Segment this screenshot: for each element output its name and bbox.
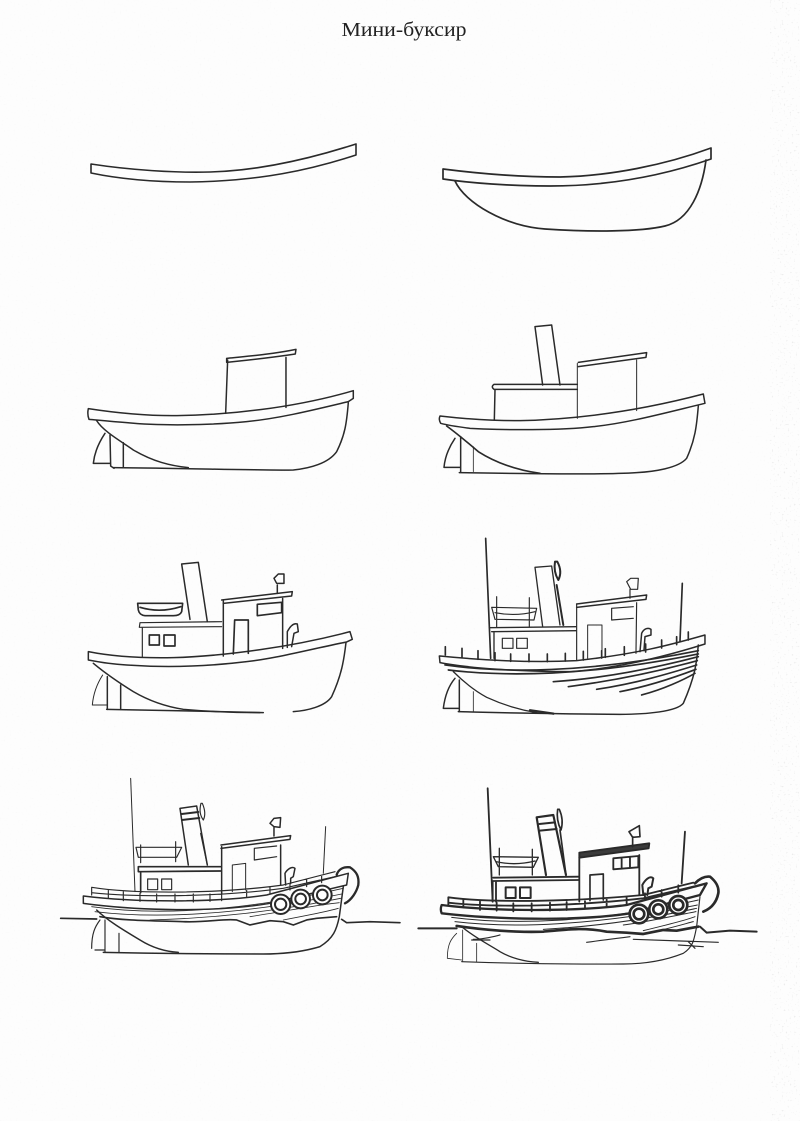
door — [590, 874, 603, 901]
roof — [222, 592, 292, 603]
hull — [455, 160, 706, 231]
windows — [502, 638, 527, 648]
step 6: masts, stakes and planks — [439, 538, 705, 714]
door — [233, 620, 248, 654]
flag on mast — [274, 574, 284, 593]
deck strip — [83, 873, 348, 910]
stern curve — [447, 426, 540, 473]
funnel — [180, 806, 207, 865]
funnel bands — [539, 822, 557, 831]
wheelhouse window — [613, 856, 638, 869]
rudder — [93, 433, 123, 468]
hull rail — [439, 394, 705, 430]
tyre 2 — [291, 890, 310, 908]
flag on mast — [627, 578, 638, 598]
funnel — [535, 325, 560, 385]
funnel — [535, 566, 560, 627]
funnel spar — [557, 809, 566, 875]
waterline — [418, 927, 757, 933]
tyre 3 — [669, 896, 687, 914]
hull body — [113, 403, 348, 470]
step 4: funnel and low house — [439, 325, 705, 474]
wheelhouse — [222, 845, 281, 893]
funnel spar — [200, 803, 207, 865]
step 5: windows, door, boat, vent — [88, 562, 352, 713]
hull planks — [445, 651, 698, 695]
vent pipe — [285, 868, 295, 885]
wave line on hull — [100, 917, 337, 925]
windows — [148, 879, 172, 890]
deck strip — [441, 883, 707, 919]
windows — [149, 635, 175, 646]
step 3: hull with cabin — [88, 349, 353, 470]
tyre 2 — [649, 900, 667, 918]
wheelhouse window — [612, 607, 633, 620]
wheelhouse — [579, 855, 639, 902]
roof — [227, 349, 296, 362]
hull body — [459, 406, 698, 474]
wheelhouse — [577, 360, 637, 418]
step 8: finished tug with ink shading — [418, 788, 757, 964]
deck strip — [443, 148, 711, 186]
upper railing — [448, 883, 693, 911]
bow mast — [682, 832, 685, 883]
hull body — [458, 645, 698, 714]
upper railing — [92, 872, 335, 902]
hull planks — [92, 888, 343, 920]
stern curve — [93, 663, 260, 713]
cabin — [226, 357, 286, 413]
lifeboat with davits — [492, 597, 537, 627]
vent pipe — [287, 624, 298, 647]
rudder — [447, 930, 477, 962]
wheelhouse — [577, 603, 637, 660]
stern curve — [462, 927, 538, 962]
hull body — [462, 897, 700, 964]
vent pipe — [640, 628, 651, 652]
step 2: deck strip and hull — [443, 148, 711, 231]
wheelhouse — [223, 598, 283, 656]
roof — [578, 353, 647, 367]
door — [588, 625, 602, 658]
step 1: deck strip — [91, 144, 356, 182]
wheelhouse window — [254, 846, 277, 860]
stern curve — [97, 421, 188, 468]
roof — [221, 836, 291, 848]
roof — [577, 595, 647, 607]
funnel spar — [555, 562, 563, 625]
tyre 1 — [271, 895, 290, 914]
hull rail — [88, 391, 353, 425]
flag on mast — [270, 818, 281, 836]
hull rail — [88, 632, 352, 666]
main mast — [488, 788, 493, 902]
rudder — [444, 437, 461, 472]
rudder — [92, 920, 119, 952]
door — [232, 863, 246, 892]
flag on mast — [629, 826, 640, 847]
main mast — [486, 538, 491, 658]
stern curve — [453, 672, 537, 713]
title: Мини-буксир — [342, 19, 466, 41]
rudder — [443, 678, 459, 712]
hull body — [103, 887, 343, 954]
low house — [489, 627, 576, 658]
tyre 1 — [630, 905, 648, 923]
low house — [138, 867, 221, 893]
deck rail — [439, 635, 705, 672]
tyre 3 — [313, 886, 332, 904]
low house — [493, 877, 578, 902]
hull body — [293, 643, 346, 712]
waterline — [61, 918, 400, 923]
main mast — [131, 778, 135, 892]
vent pipe — [642, 877, 653, 895]
stern curve — [97, 910, 178, 952]
hull planks — [452, 900, 698, 933]
low house — [139, 622, 222, 657]
deck stakes — [445, 632, 688, 662]
funnel bands — [182, 812, 199, 820]
roof — [579, 843, 649, 858]
step 7: waterline, tyres, bow fender — [61, 778, 400, 954]
bow fender — [695, 877, 718, 912]
funnel — [537, 815, 566, 875]
wave line on hull — [457, 926, 698, 934]
bow mast — [680, 583, 682, 642]
lifeboat — [138, 603, 183, 616]
lifeboat with davits — [136, 842, 182, 863]
bow mast — [323, 827, 326, 873]
lifeboat with davits — [493, 848, 538, 875]
water ripples — [472, 935, 718, 948]
windows — [506, 887, 531, 898]
low house — [492, 384, 577, 420]
wheelhouse window — [257, 602, 282, 616]
bow fender — [337, 867, 359, 903]
rudder — [92, 675, 107, 705]
funnel — [182, 562, 207, 622]
